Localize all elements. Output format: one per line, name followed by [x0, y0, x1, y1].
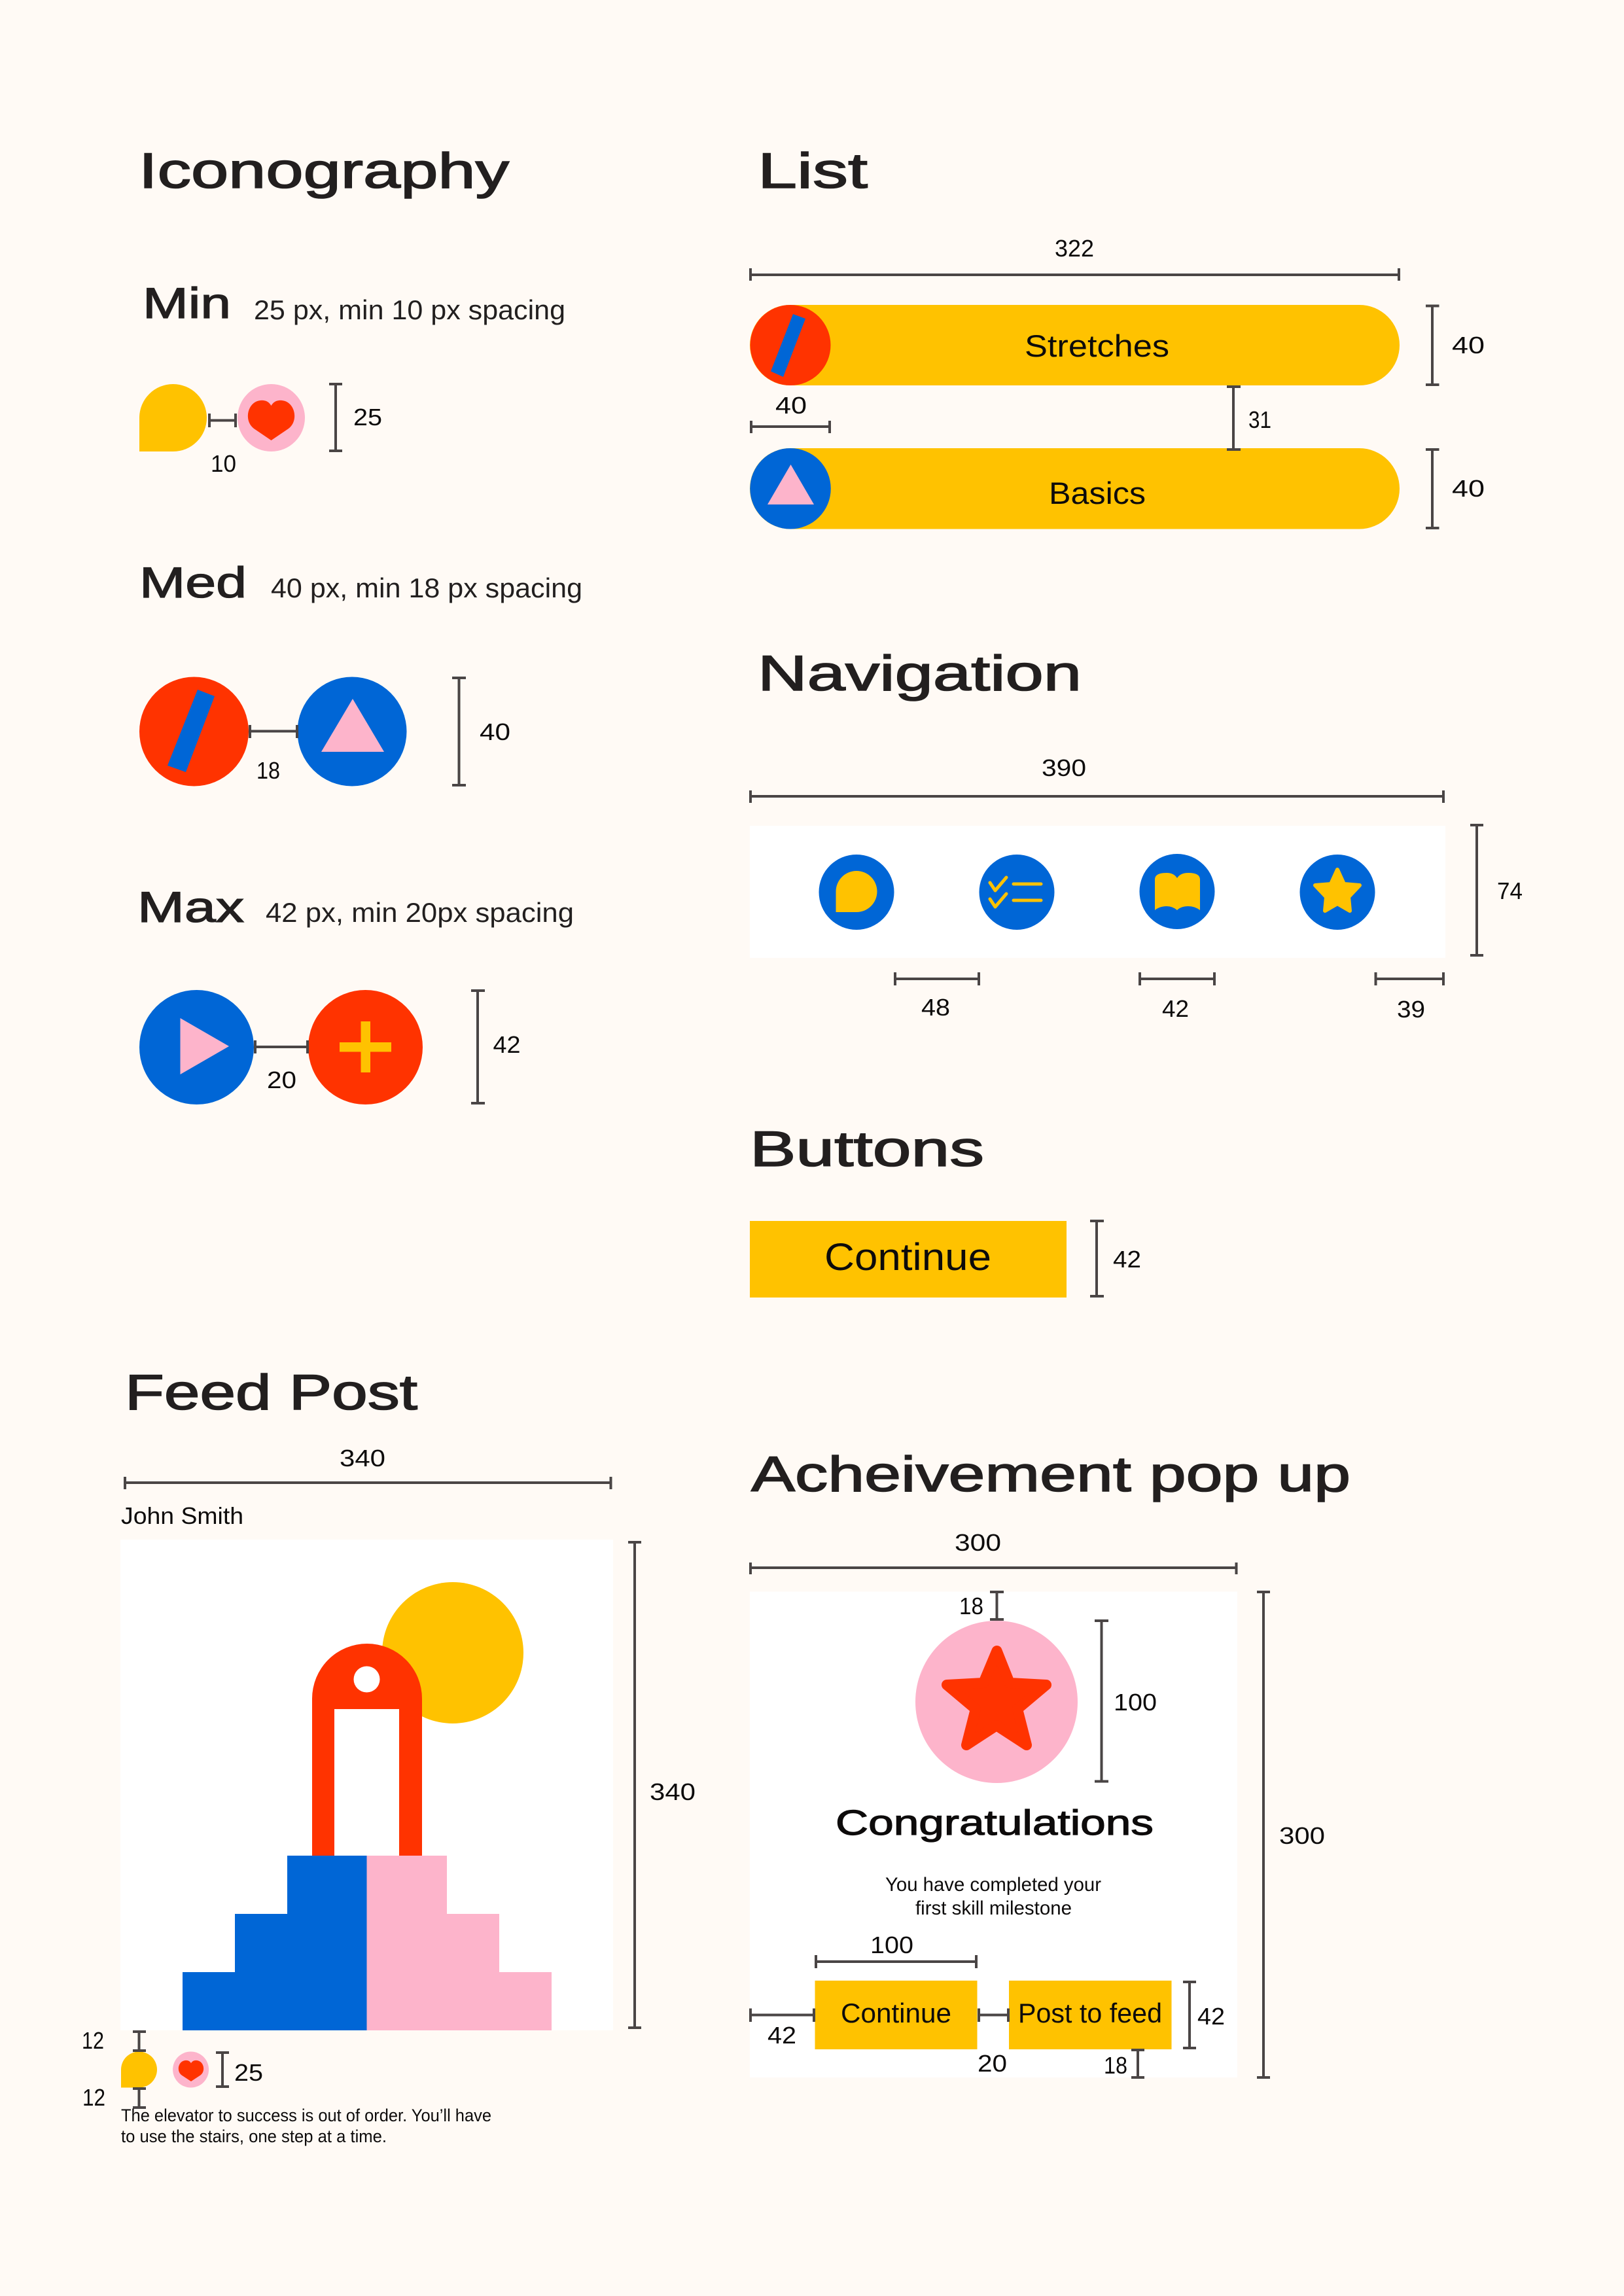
dimension: height 300: 300	[1279, 1822, 1325, 1849]
dimension: width 340: 340	[340, 1445, 385, 1472]
dimension: gap 48	[895, 972, 979, 1021]
heading: Buttons: Buttons	[750, 1122, 984, 1177]
dimension: top margin 18: 18	[959, 1593, 983, 1619]
description: Max size: 42 px, min 20px spacing	[266, 897, 574, 928]
label: Min: Min	[143, 279, 231, 327]
button: Continue: Continue	[824, 1236, 991, 1279]
dimension: button height 42	[1183, 1982, 1225, 2048]
dimension: height 42	[471, 991, 521, 1103]
dimension: bottom margin 18: 18	[1104, 2052, 1127, 2079]
icon: blue circle with pink triangle	[297, 677, 407, 786]
list item: Basics	[750, 448, 1400, 529]
label: Max: Max	[137, 883, 244, 931]
dimension: bottom margin 18	[1104, 2050, 1144, 2079]
popup title: Congratulations	[836, 1803, 1154, 1843]
popup message: You have completed your	[885, 1874, 1101, 1896]
dimension: height 40 bottom item	[1426, 450, 1485, 528]
dimension: height 300	[1257, 1592, 1325, 2077]
dimension: height 40 top item	[1426, 306, 1485, 385]
dimension: top spacing 12: 12	[82, 2027, 104, 2054]
subsection: Min	[139, 279, 565, 477]
panel: list	[750, 143, 1485, 529]
description: Med size: 40 px, min 18 px spacing	[271, 573, 582, 603]
navigation bar	[750, 826, 1445, 958]
dimension: height 25	[329, 384, 382, 451]
dimension: spacing 20	[255, 1040, 308, 1093]
dimension: height 42: 42	[493, 1031, 521, 1058]
dimension: right 74	[1470, 825, 1523, 955]
dimension: top margin 18	[959, 1592, 1004, 1619]
dimension: height 340: 340	[650, 1778, 696, 1805]
icon: small heart	[173, 2052, 209, 2087]
dimension: icon height 25: 25	[234, 2059, 263, 2086]
dimension: spacing 18	[250, 725, 297, 784]
list item: Stretches	[750, 305, 1400, 385]
dimension: margin 39	[1375, 972, 1443, 1023]
dimension: icon height 25	[216, 2053, 263, 2087]
illustration: elevator and stairs	[120, 1540, 613, 2030]
dimension: width 300	[750, 1529, 1237, 1574]
dimension: width 322	[750, 235, 1399, 281]
caption	[121, 2106, 491, 2146]
subsection: Med	[139, 558, 582, 786]
button: Continue: Continue	[841, 1998, 951, 2028]
icon: nav star	[1299, 855, 1375, 930]
caption: to use the stairs, one step at a time.	[121, 2127, 387, 2146]
heading: Acheivement pop up: Acheivement pop up	[751, 1447, 1350, 1502]
dimension: right 74: 74	[1497, 877, 1523, 904]
list item: Stretches: Stretches	[1025, 328, 1169, 363]
panel: buttons	[750, 1122, 1141, 1298]
dimension: height 40	[452, 678, 510, 785]
dimension: gap 48: 48	[921, 994, 950, 1021]
description: Min size: 25 px, min 10 px spacing	[254, 294, 565, 325]
panel: navigation	[750, 646, 1523, 1023]
dimension: width 322: 322	[1055, 235, 1094, 262]
dimension: spacing 18: 18	[256, 757, 280, 784]
caption: The elevator to success is out of order. You’ll have	[121, 2106, 491, 2125]
dimension: spacing 10	[209, 414, 236, 477]
dimension: width 390: 390	[1042, 754, 1086, 781]
dimension: icon 42: 42	[1162, 995, 1189, 1022]
dimension: star height 100	[1095, 1621, 1157, 1781]
panel: achievement pop up	[750, 1447, 1350, 2079]
button: Continue	[815, 1981, 978, 2049]
dimension: button height 42	[1090, 1221, 1141, 1296]
dimension: button width 100: 100	[870, 1932, 913, 1958]
icon: blue circle with play triangle	[139, 990, 254, 1104]
dimension: gap 31: 31	[1248, 406, 1271, 433]
dimension: height 40 bottom item: 40	[1452, 475, 1485, 502]
dimension: left margin 42	[750, 2009, 814, 2049]
icon: achievement star	[915, 1621, 1078, 1783]
dimension: top spacing 12	[82, 2027, 146, 2054]
icon: red circle with blue bar	[139, 677, 249, 786]
panel: iconography	[137, 143, 582, 1104]
dimension: left margin 42: 42	[768, 2022, 796, 2049]
heading: Navigation: Navigation	[758, 646, 1082, 701]
dimension: spacing 20: 20	[267, 1067, 296, 1093]
popup card	[750, 1591, 1237, 2077]
dimension: star height 100: 100	[1114, 1689, 1157, 1716]
icon: red circle with plus	[308, 990, 423, 1104]
heading: Feed Post: Feed Post	[125, 1365, 417, 1421]
dimension: gap 31	[1227, 387, 1271, 450]
dimension: icon 42	[1140, 972, 1214, 1022]
dimension: height 40: 40	[480, 718, 510, 745]
dimension: button height 42: 42	[1197, 2003, 1225, 2030]
dimension: bottom spacing 12	[82, 2084, 146, 2111]
popup message	[885, 1874, 1101, 1919]
dimension: width 390	[750, 754, 1443, 803]
dimension: spacing 10: 10	[211, 450, 236, 477]
heading: Iconography: Iconography	[139, 143, 509, 199]
icon: small yellow bubble	[121, 2052, 157, 2087]
dimension: bottom spacing 12: 12	[82, 2084, 105, 2111]
label: Med: Med	[139, 558, 247, 607]
dimension: icon width 40: 40	[775, 392, 807, 419]
dimension: height 25: 25	[353, 404, 382, 431]
dimension: height 340	[628, 1542, 696, 2028]
dimension: icon width 40	[751, 392, 830, 433]
dimension: height 40 top item: 40	[1452, 332, 1485, 359]
subsection: Max	[137, 883, 574, 1104]
panel: feed post	[82, 1365, 696, 2146]
dimension: button gap 20	[978, 2009, 1008, 2077]
list item: Basics: Basics	[1049, 476, 1146, 510]
dimension: button gap 20: 20	[978, 2050, 1007, 2077]
dimension: margin 39: 39	[1397, 996, 1425, 1023]
button: Continue	[750, 1221, 1067, 1298]
dimension: button height 42: 42	[1113, 1246, 1141, 1273]
icon: heart in pink circle	[238, 384, 305, 451]
heading: List: List	[758, 143, 868, 199]
button: Post to feed: Post to feed	[1018, 1998, 1162, 2028]
dimension: width 340	[125, 1445, 611, 1489]
icon: yellow speech bubble	[139, 384, 207, 451]
popup message: first skill milestone	[915, 1898, 1072, 1919]
icon: nav checklist	[979, 855, 1055, 930]
dimension: width 300: 300	[955, 1529, 1001, 1556]
dimension: button width 100	[816, 1932, 976, 1968]
author name: John Smith	[121, 1502, 243, 1529]
icon: nav bubble	[819, 855, 894, 930]
icon: nav book	[1140, 854, 1214, 929]
button: Post to feed	[1009, 1981, 1171, 2049]
